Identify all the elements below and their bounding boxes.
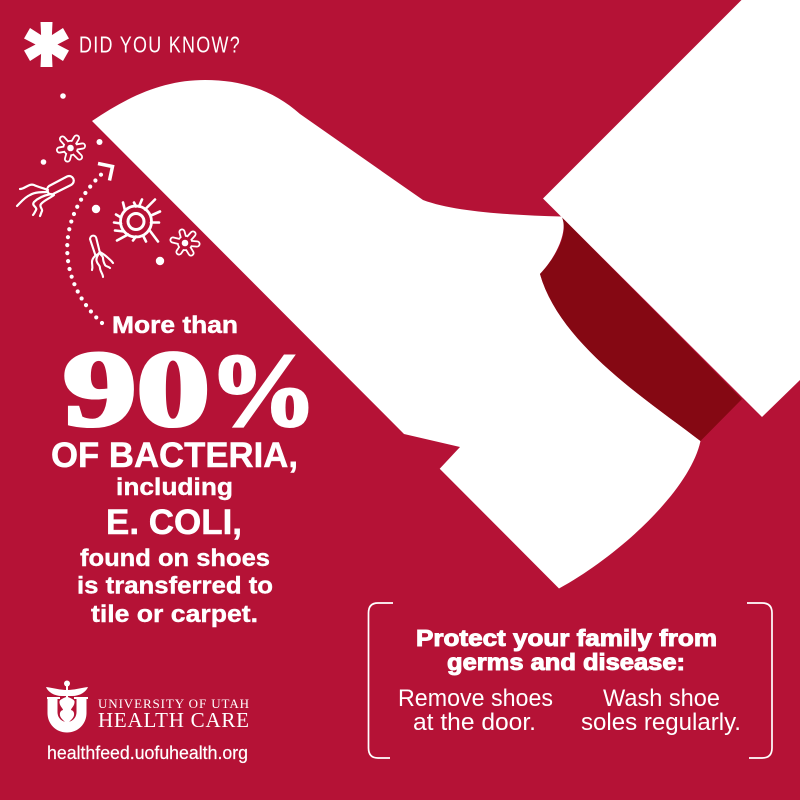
wordmark line 1: UNIVERSITY OF UTAH xyxy=(98,696,249,711)
tip: remove shoes xyxy=(398,685,553,736)
big number: 90 percent xyxy=(63,330,317,449)
icon: caduceus U xyxy=(46,680,88,732)
dotted arrow arc xyxy=(67,164,112,323)
panel: protect your family xyxy=(368,603,772,758)
tip: remove shoes: at the door. xyxy=(413,709,536,736)
text: found on shoes: found on shoes xyxy=(80,545,270,572)
text: more than: More than xyxy=(112,312,238,339)
icon: flagellated bacterium left xyxy=(17,176,74,216)
bracket left xyxy=(368,603,393,758)
dark sock band xyxy=(540,218,742,441)
heading: did you know: DID YOU KNOW? xyxy=(79,32,240,58)
icon: asterisk xyxy=(24,22,69,67)
stat text block xyxy=(51,312,317,628)
big number: 90 percent: % xyxy=(209,333,317,448)
panel heading xyxy=(416,625,717,675)
text: e. coli: E. COLI, xyxy=(106,503,242,542)
text: tile or carpet: tile or carpet. xyxy=(91,601,258,628)
logo: university of utah health care xyxy=(46,680,249,732)
text: is transferred to: is transferred to xyxy=(77,572,273,600)
icon: spiky round germ xyxy=(114,200,160,242)
floating dots xyxy=(41,93,164,265)
bacteria cluster xyxy=(17,93,197,277)
illustration: shoe stepping down xyxy=(92,0,800,588)
text: of bacteria: OF BACTERIA, xyxy=(51,436,298,475)
shoe sole and body xyxy=(92,80,700,588)
tip: remove shoes: Remove shoes xyxy=(398,685,553,712)
icon: star germ right xyxy=(173,232,197,253)
big number: 90 percent: 90 xyxy=(63,330,210,449)
website url: healthfeed.uofuhealth.org xyxy=(47,743,248,763)
tip: wash shoe soles: soles regularly. xyxy=(581,709,741,736)
icon: star germ top xyxy=(60,138,82,159)
icon: flagellated bacterium lower xyxy=(90,236,113,277)
bracket right xyxy=(747,603,772,758)
tip: wash shoe soles: Wash shoe xyxy=(603,685,720,712)
panel heading: germs and disease: xyxy=(447,649,685,675)
tip: wash shoe soles xyxy=(581,685,741,736)
trouser leg xyxy=(543,0,800,417)
panel heading: Protect your family from xyxy=(416,625,717,651)
text: including: including xyxy=(116,474,233,501)
wordmark line 2: HEALTH CARE xyxy=(98,708,249,732)
